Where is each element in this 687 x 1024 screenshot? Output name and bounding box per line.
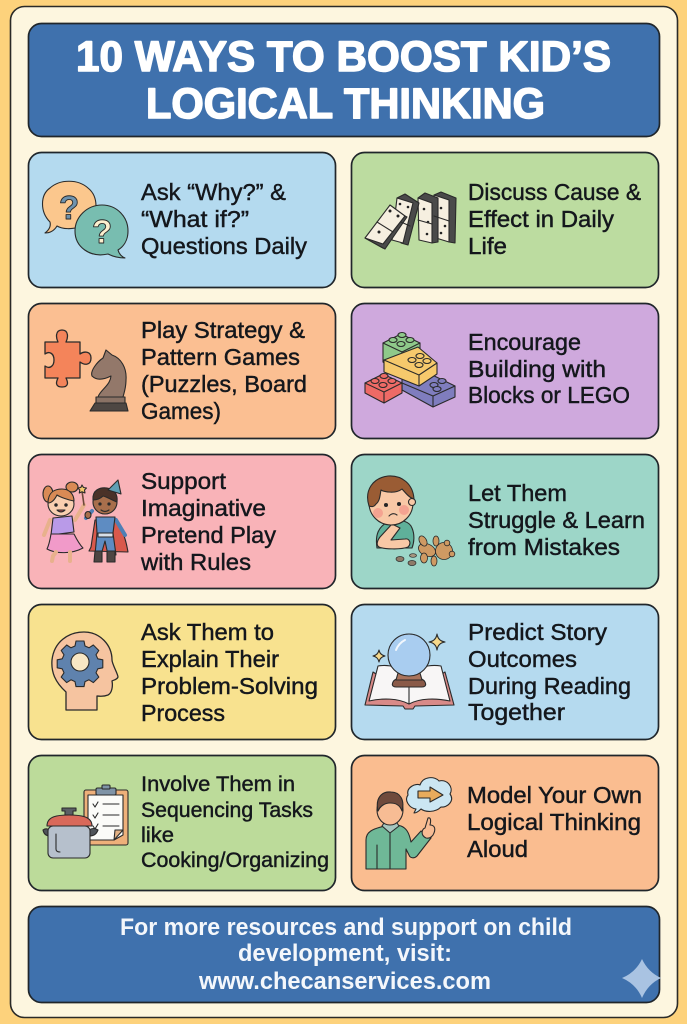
card text: like [141,823,174,847]
card text: Process [141,700,225,726]
card text: Explain Their [141,646,279,672]
panel: building with blocks [352,304,658,438]
panel: sequencing tasks [28,756,336,890]
icon: sparkle star [622,959,661,998]
card text: Outcomes [468,646,577,672]
card text: Pattern Games [141,344,300,370]
panel: struggle and learn from mistakes [352,454,658,588]
card text: Predict Story [468,619,607,645]
icon: speech bubbles with question marks: ? [92,213,112,250]
card text: Together [468,699,565,725]
footer text: www.checanservices.com [198,968,491,995]
card text: Life [468,233,507,259]
card text: Ask Them to [141,619,274,645]
card text [141,619,318,726]
card text: with Rules [140,549,251,575]
card text [468,179,641,259]
card text: Involve Them in [141,772,295,796]
icon: crystal ball on open book [365,634,454,709]
footer text [120,914,572,995]
card text: Imaginative [141,495,266,521]
card text: Problem-Solving [141,673,318,699]
panel: model logical thinking [352,756,658,890]
card text: Logical Thinking [467,809,641,835]
footer text: development, visit: [238,940,452,967]
panel: strategy and pattern games [28,304,336,438]
title banner [28,24,660,136]
card text: Struggle & Learn [468,507,645,533]
card text: from Mistakes [468,534,620,560]
card text: Ask “Why?” & [141,179,286,205]
card text: Building with [468,356,606,382]
card text: Cooking/Organizing [141,848,329,872]
card text: Play Strategy & [141,317,305,343]
icon: thinking boy and teddy bear [368,476,455,566]
card text: Support [141,468,226,494]
card text: Games) [141,398,221,424]
card text: Encourage [468,329,581,355]
card text: Aloud [467,836,528,862]
icon: cooking pot and clipboard [43,785,128,858]
icon: stacked lego bricks [365,332,455,407]
card text: Sequencing Tasks [141,798,313,822]
card text: Effect in Daily [468,206,614,232]
card text: During Reading [468,673,631,699]
icon: speech bubbles with question marks [42,181,128,258]
card text [467,782,642,862]
icon: head with gear [52,632,118,710]
card text: Pretend Play [141,522,276,548]
card text: “What if?” [141,206,249,232]
card text: Model Your Own [467,782,642,808]
icon: speech bubbles with question marks: ? [59,189,79,226]
card text: Discuss Cause & [468,179,641,205]
icon: girl with wand and boy with cape [43,480,128,562]
title text: LOGICAL THINKING [146,80,545,128]
footer banner [28,906,661,1002]
card text: (Puzzles, Board [141,371,307,397]
panel: explain problem solving [28,604,336,740]
card text [468,329,630,408]
card text [141,772,329,872]
card text [140,468,276,575]
icon: man pointing with thought cloud [366,778,452,869]
title text: 10 WAYS TO BOOST KID’S [76,33,611,81]
card text: Let Them [468,480,567,506]
card text: Blocks or LEGO [468,382,630,408]
panel: ask why and what if [28,152,336,288]
card text [468,619,631,725]
card text [468,480,645,560]
footer text: For more resources and support on child [120,914,572,941]
card text [141,179,307,259]
panel: imaginative pretend play [28,454,336,588]
title text [76,33,611,128]
panel: predict story outcomes [352,604,658,740]
panel: discuss cause and effect [352,152,658,288]
card text: Questions Daily [141,233,307,259]
icon: puzzle piece and chess knight [45,330,128,411]
card text [141,317,307,424]
icon: falling dominoes [365,192,456,249]
